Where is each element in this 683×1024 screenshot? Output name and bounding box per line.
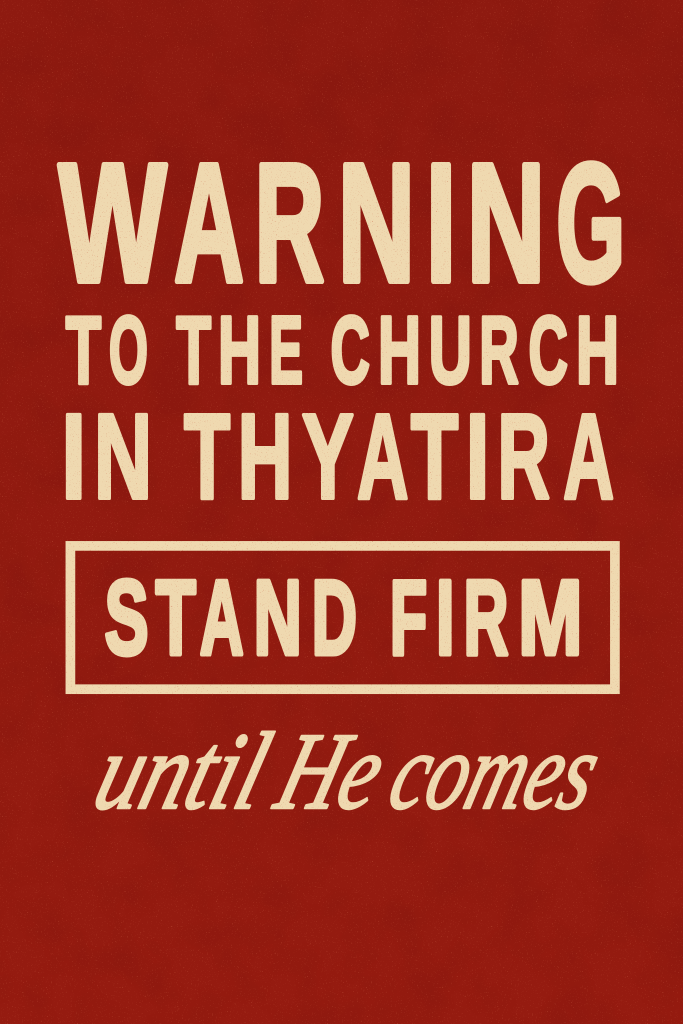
tagline: until He comes: until <box>83 711 283 833</box>
tagline: until He comes: He <box>263 711 398 833</box>
heading: WARNING: N <box>467 128 545 317</box>
tagline: until He comes: comes <box>378 711 613 833</box>
heading: TO THE CHURCH: T <box>66 297 101 404</box>
heading: IN THYATIRA: R <box>498 389 550 524</box>
callout text: D <box>312 559 357 677</box>
heading: WARNING: N <box>338 128 415 317</box>
heading: TO THE CHURCH: C <box>528 297 568 404</box>
heading: TO THE CHURCH: O <box>109 297 148 404</box>
heading: TO THE CHURCH: H <box>576 297 619 404</box>
heading: WARNING: A <box>174 128 244 317</box>
heading: TO THE CHURCH: U <box>429 297 472 404</box>
heading: TO THE CHURCH: T <box>176 297 211 404</box>
heading: TO THE CHURCH: H <box>218 297 261 404</box>
heading: IN THYATIRA: H <box>238 389 292 524</box>
callout text: S <box>105 559 148 677</box>
callout text: R <box>464 559 508 677</box>
callout text: T <box>156 559 196 677</box>
callout: STAND FIRM box <box>70 546 615 689</box>
heading: TO THE CHURCH: H <box>378 297 421 404</box>
heading: WARNING: W <box>59 128 166 317</box>
callout text: N <box>254 559 302 677</box>
heading: IN THYATIRA: A <box>357 389 408 524</box>
callout text: A <box>200 559 244 677</box>
heading: IN THYATIRA: I <box>61 389 86 524</box>
heading: IN THYATIRA: T <box>184 389 230 524</box>
callout text: F <box>390 559 427 677</box>
heading: WARNING: R <box>254 128 324 317</box>
callout text: I <box>436 559 454 677</box>
heading: TO THE CHURCH: C <box>330 297 370 404</box>
heading: IN THYATIRA: A <box>563 389 614 524</box>
box outline <box>70 546 615 689</box>
callout text: M <box>518 559 582 677</box>
heading: TO THE CHURCH: R <box>479 297 519 404</box>
heading: WARNING: I <box>426 128 456 317</box>
heading: IN THYATIRA: N <box>94 389 152 524</box>
heading: IN THYATIRA: Y <box>302 389 354 524</box>
heading: IN THYATIRA: T <box>411 389 458 524</box>
heading: IN THYATIRA: I <box>466 389 490 524</box>
heading: TO THE CHURCH: E <box>269 297 303 404</box>
